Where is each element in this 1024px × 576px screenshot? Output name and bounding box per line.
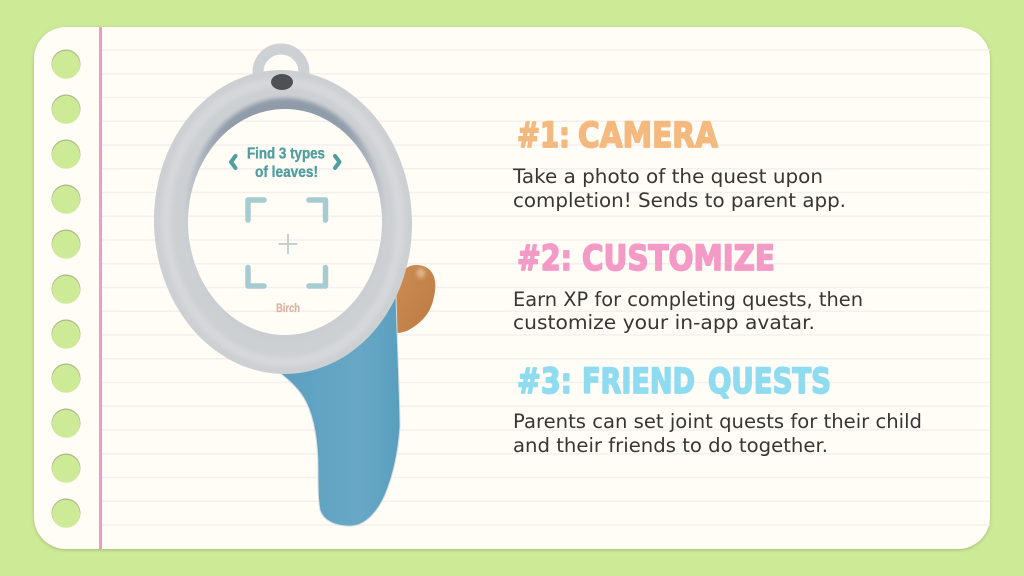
icon: left chevron <box>231 156 236 168</box>
body text: completion! Sends to parent app. <box>513 189 846 212</box>
icon: dark camera lens <box>271 74 293 90</box>
heading: CAMERA <box>578 116 718 156</box>
body text: and their friends to do together. <box>513 434 828 457</box>
heading: FRIEND <box>582 362 695 402</box>
illustration: handheld device <box>149 49 435 526</box>
icon: crosshair plus <box>278 234 298 254</box>
body text: Take a photo of the quest upon <box>512 165 823 188</box>
icon: right chevron <box>335 156 340 168</box>
grey oval frame <box>149 66 417 378</box>
section 2: customize <box>513 239 863 334</box>
body text: Earn XP for completing quests, then <box>513 288 863 311</box>
heading: #2: <box>517 239 572 279</box>
body text: Parents can set joint quests for their child <box>513 410 922 433</box>
quest prompt text: of leaves! <box>255 164 318 181</box>
body text: customize your in-app avatar. <box>513 311 815 334</box>
ring hanger loop <box>258 49 304 95</box>
heading: #1: <box>517 116 570 156</box>
icon: orange side button <box>394 265 435 333</box>
selected label: Birch <box>276 303 300 315</box>
heading: CUSTOMIZE <box>582 239 775 279</box>
icon: viewfinder brackets <box>248 200 326 286</box>
quest prompt text: Find 3 types <box>247 146 325 162</box>
heading: #3: <box>517 362 572 402</box>
section 1: camera <box>512 116 846 212</box>
section 3: friend quests <box>513 362 922 457</box>
binder holes <box>52 50 80 528</box>
heading: QUESTS <box>708 362 831 402</box>
frame inner shadow <box>185 98 385 340</box>
blue handle <box>280 295 400 526</box>
device screen <box>188 109 382 335</box>
